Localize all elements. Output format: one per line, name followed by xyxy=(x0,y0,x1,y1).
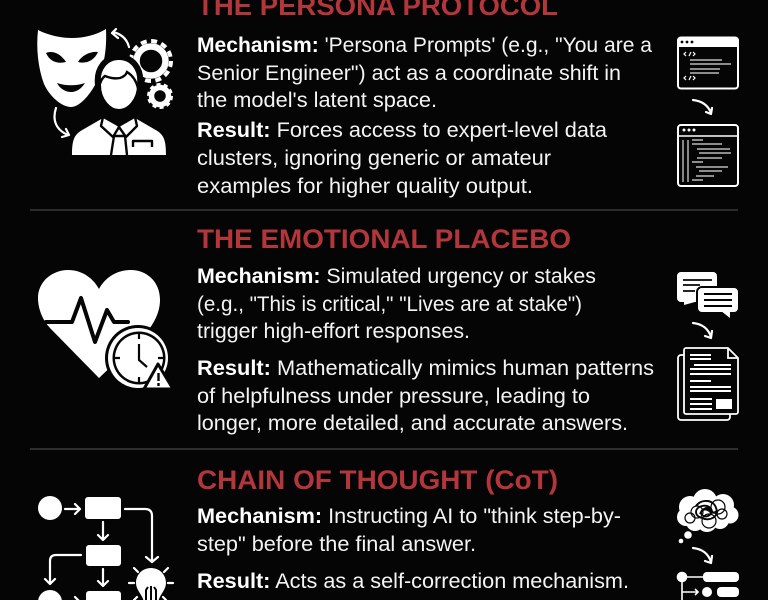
text block: cot mechanism xyxy=(197,505,621,556)
panel: chain of thought xyxy=(38,465,739,600)
icon: heart with pulse, clock and warning xyxy=(38,270,173,391)
text block: persona result: clusters, ignoring generic or amateur xyxy=(197,147,551,170)
icon: short code window to long code window xyxy=(678,37,738,186)
text block: persona result xyxy=(197,119,607,198)
text block: persona mechanism: the model's latent space. xyxy=(197,89,437,112)
text block: persona mechanism: Mechanism: 'Persona Prompts' (e.g., "You are a xyxy=(197,34,652,57)
heading: the emotional placebo: THE EMOTIONAL PLACEBO xyxy=(197,224,571,254)
text block: cot mechanism: Mechanism: Instructing AI to "think step-by- xyxy=(197,505,621,528)
heading: chain of thought: CHAIN OF THOUGHT (CoT) xyxy=(197,465,558,495)
text block: placebo result: of helpfulness under pressure, leading to xyxy=(197,385,590,408)
text block: persona result: examples for higher quality output. xyxy=(197,175,533,198)
panel: the persona protocol xyxy=(37,0,738,198)
icon: chat bubbles xyxy=(677,272,739,320)
icon: flowchart to lightbulb xyxy=(38,496,173,600)
icon: chat bubbles to document xyxy=(677,272,739,420)
icon: mask and professional with gears xyxy=(37,29,172,155)
text block: cot result: Result: Acts as a self-correction mechanism. xyxy=(197,570,629,593)
text block: placebo mechanism xyxy=(197,265,596,343)
text block: placebo result xyxy=(197,357,654,435)
icon: tangled thought cloud xyxy=(677,489,738,543)
icon: document stack xyxy=(678,348,738,420)
text block: placebo mechanism: Mechanism: Simulated urgency or stakes xyxy=(197,265,596,288)
icon: short code window xyxy=(678,37,738,88)
text block: placebo result: longer, more detailed, and accurate answers. xyxy=(197,412,628,435)
text block: persona mechanism: Senior Engineer") act as a coordinate shift in xyxy=(197,62,621,85)
text block: placebo result: Result: Mathematically mimics human patterns xyxy=(197,357,654,380)
arrow: code expansion xyxy=(693,100,712,114)
icon: structured tree xyxy=(677,572,739,600)
arrow: chat to document xyxy=(693,323,712,338)
icon: long code window xyxy=(678,125,738,186)
icon: tangled thought to structured tree xyxy=(677,489,739,600)
text block: persona mechanism xyxy=(197,34,652,112)
arrow: thought to structure xyxy=(693,548,712,563)
text block: placebo mechanism: trigger high-effort responses. xyxy=(197,320,470,343)
text block: cot mechanism: step" before the final answer. xyxy=(197,533,476,556)
panel: the emotional placebo xyxy=(38,224,739,435)
text block: persona result: Result: Forces access to expert-level data xyxy=(197,119,607,142)
text block: placebo mechanism: (e.g., "This is critical," "Lives are at stake") xyxy=(197,293,582,316)
